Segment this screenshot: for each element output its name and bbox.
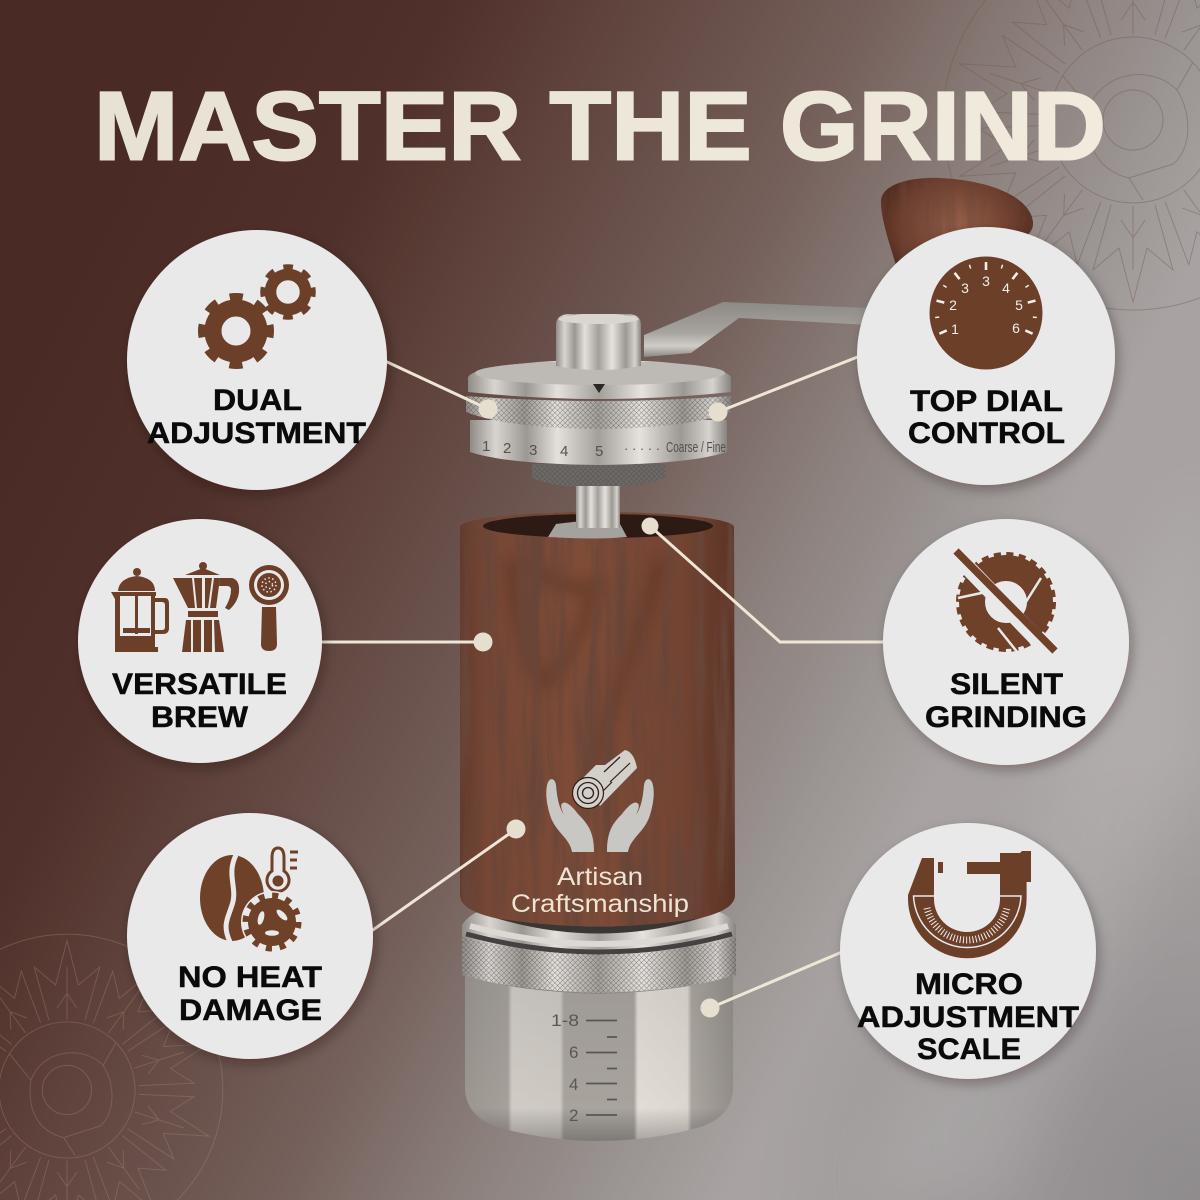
grinder handle knob bbox=[881, 178, 1033, 264]
panel: versatile brew bbox=[78, 519, 322, 763]
label bbox=[908, 385, 1065, 450]
grinder scale band: 1 bbox=[482, 438, 490, 455]
grinder scale band: 2 bbox=[503, 440, 511, 457]
grinder volume scale: 6 bbox=[569, 1043, 578, 1062]
icon: dial: 3 bbox=[961, 280, 969, 296]
label: BREW bbox=[151, 701, 249, 734]
title: MASTER THE GRIND bbox=[94, 72, 1106, 180]
grinder wooden body bbox=[455, 505, 740, 935]
left hand bbox=[546, 779, 594, 852]
grinder volume scale: 2 bbox=[569, 1106, 578, 1125]
icon: dial bbox=[930, 256, 1042, 370]
label: CONTROL bbox=[908, 417, 1065, 450]
callout lines bbox=[320, 356, 885, 1008]
label: NO HEAT bbox=[178, 961, 322, 994]
label: SILENT bbox=[950, 668, 1063, 701]
icon: micrometer bbox=[908, 851, 1031, 958]
grinder scale band: Coarse / Fine bbox=[666, 439, 726, 456]
label: DUAL bbox=[213, 384, 302, 417]
label bbox=[925, 668, 1087, 734]
grinder wooden rim opening bbox=[483, 514, 713, 538]
label: TOP DIAL bbox=[910, 385, 1063, 418]
label: GRINDING bbox=[925, 701, 1087, 734]
callout dots bbox=[474, 400, 728, 1018]
engraved brand text: Artisan bbox=[557, 863, 643, 891]
label bbox=[147, 384, 366, 450]
engraved brand text bbox=[511, 863, 689, 918]
icon: coffee bean bbox=[200, 855, 264, 942]
icon: moka pot bbox=[173, 562, 239, 652]
grinder crank lever bbox=[644, 302, 870, 357]
decorative mandala bottom left bbox=[0, 934, 223, 1200]
label: MICRO bbox=[915, 968, 1023, 1001]
icon: dial: 4 bbox=[1002, 280, 1010, 296]
grinder lower knurled ring bbox=[462, 937, 736, 993]
panel: dual adjustment bbox=[127, 230, 387, 490]
icon: gears bbox=[202, 267, 313, 365]
grinder top cap bbox=[556, 314, 641, 370]
panel: top dial control bbox=[857, 227, 1115, 485]
log bbox=[572, 750, 637, 808]
icon: dial: 5 bbox=[1015, 297, 1023, 313]
grinder volume scale: 4 bbox=[569, 1075, 578, 1094]
grinder volume scale: 1-8 bbox=[551, 1011, 579, 1030]
icon: dial: 3 bbox=[982, 273, 990, 289]
grinder scale band: 5 bbox=[595, 443, 603, 460]
grinder thread collar bbox=[462, 908, 736, 962]
grinder product illustration bbox=[455, 175, 1040, 1141]
icon: dial: 1 bbox=[951, 321, 959, 337]
icon: portafilter bbox=[249, 565, 289, 651]
panel: silent grinding bbox=[883, 519, 1129, 765]
icon: saw blade crossed out bbox=[949, 548, 1059, 662]
label: ADJUSTMENT bbox=[147, 417, 366, 450]
panel: no heat damage bbox=[127, 813, 373, 1059]
grinder scale band: 3 bbox=[529, 442, 537, 459]
grinder scale band bbox=[470, 420, 727, 465]
grinder scale band: 4 bbox=[560, 443, 568, 460]
icon: french press bbox=[111, 568, 169, 652]
panel: micro adjustment scale bbox=[840, 823, 1096, 1079]
label: SCALE bbox=[917, 1033, 1021, 1066]
label: ADJUSTMENT bbox=[857, 1001, 1079, 1034]
icon: dial: 6 bbox=[1012, 320, 1020, 336]
grinder top plate bbox=[468, 360, 731, 399]
icon: dial: 2 bbox=[949, 297, 957, 313]
label: DAMAGE bbox=[179, 994, 322, 1027]
grinder volume scale bbox=[551, 1011, 617, 1125]
label bbox=[112, 668, 287, 734]
grinder shaft bbox=[576, 486, 620, 528]
grinder steel cup bbox=[465, 975, 733, 1141]
label: VERSATILE bbox=[112, 668, 287, 701]
decorative mandala top right bbox=[943, 0, 1200, 310]
grinder burr gear bbox=[532, 464, 665, 488]
icon: gear with holes bbox=[241, 891, 303, 953]
right hand bbox=[607, 779, 654, 852]
label bbox=[857, 968, 1079, 1066]
label bbox=[178, 961, 322, 1027]
icon: hands holding log bbox=[546, 750, 654, 852]
engraved brand text: Craftsmanship bbox=[511, 890, 689, 918]
grinder knurled ring bbox=[466, 396, 731, 429]
icon: thermometer bbox=[267, 848, 298, 891]
grinder scale band: · · · · · bbox=[624, 441, 660, 456]
